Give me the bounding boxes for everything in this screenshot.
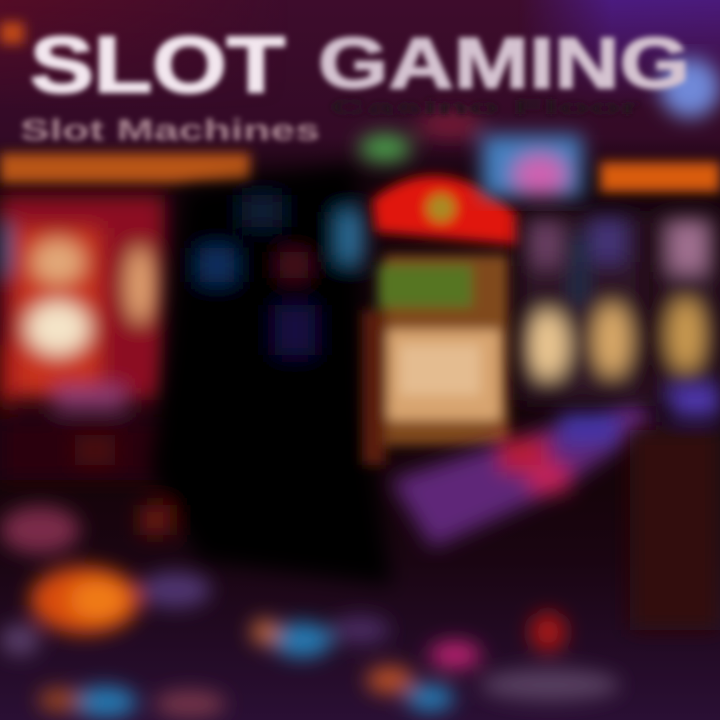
subtitle: Casino Floor — [330, 97, 641, 119]
top banner backdrop — [0, 0, 720, 110]
left slot machine — [0, 195, 180, 480]
floor lights and reflections — [0, 506, 620, 718]
dark central machine — [75, 165, 392, 585]
title: SLOT — [30, 20, 285, 109]
subtitle: Slot Machines — [20, 114, 320, 147]
center machine keypad — [390, 398, 652, 548]
colorful ceiling lights — [359, 58, 720, 197]
title: GAMING — [318, 24, 690, 104]
center slot machine — [362, 176, 520, 465]
right slot machines — [520, 215, 720, 630]
subtitle — [20, 97, 641, 147]
orange ledges — [0, 22, 720, 192]
title — [30, 20, 690, 109]
